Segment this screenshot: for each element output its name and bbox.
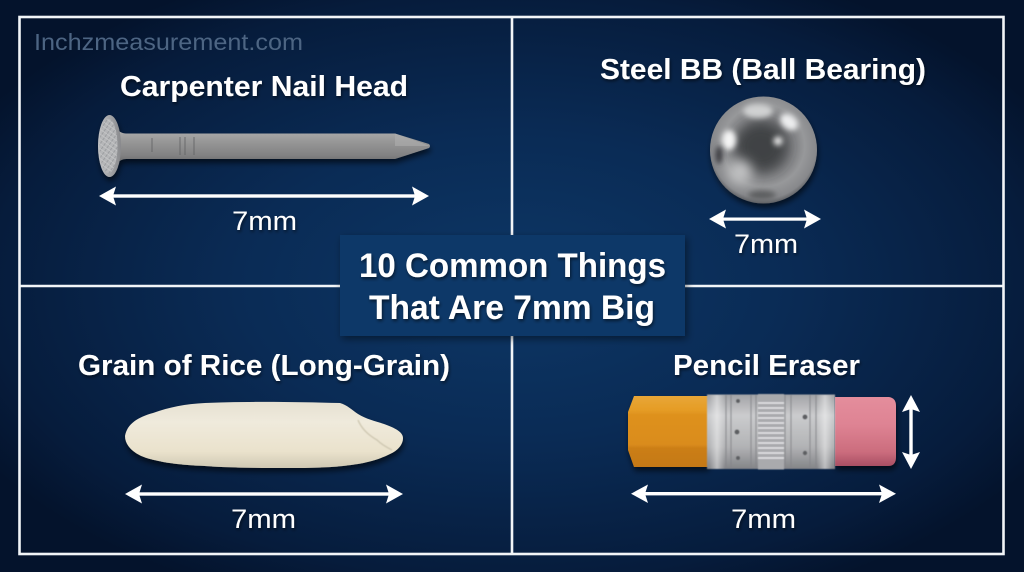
watermark: Inchzmeasurement.com [34, 29, 303, 55]
title text: 10 Common Things [359, 247, 666, 285]
panel: grain of rice [78, 350, 450, 534]
heading: grain of rice: Grain of Rice (Long-Grain) [78, 350, 450, 382]
icon: steel ball [710, 96, 817, 204]
title text [359, 247, 666, 327]
arrow: BB width [709, 210, 821, 228]
icon: pencil end with eraser [628, 394, 896, 470]
label: nail 7mm: 7mm [232, 206, 297, 236]
arrow: rice length [125, 484, 403, 504]
title text: That Are 7mm Big [369, 289, 655, 327]
arrow: nail width [99, 186, 429, 206]
label: BB 7mm: 7mm [734, 229, 798, 259]
pencil wood [628, 396, 708, 467]
heading: steel BB: Steel BB (Ball Bearing) [600, 54, 926, 86]
title box [340, 235, 685, 336]
arrow: eraser length [631, 484, 896, 503]
label: rice 7mm: 7mm [231, 504, 296, 534]
label: eraser 7mm: 7mm [731, 504, 796, 534]
panel: steel BB [600, 54, 926, 259]
panel: pencil eraser [628, 350, 920, 534]
eraser [835, 397, 896, 466]
icon: nail [98, 115, 430, 177]
heading: carpenter nail head: Carpenter Nail Head [120, 71, 408, 103]
metal ferrule [707, 394, 835, 470]
icon: rice grain [125, 402, 403, 468]
heading: pencil eraser: Pencil Eraser [673, 350, 860, 382]
panel: carpenter nail head [98, 71, 430, 236]
arrow: eraser height [902, 395, 920, 469]
